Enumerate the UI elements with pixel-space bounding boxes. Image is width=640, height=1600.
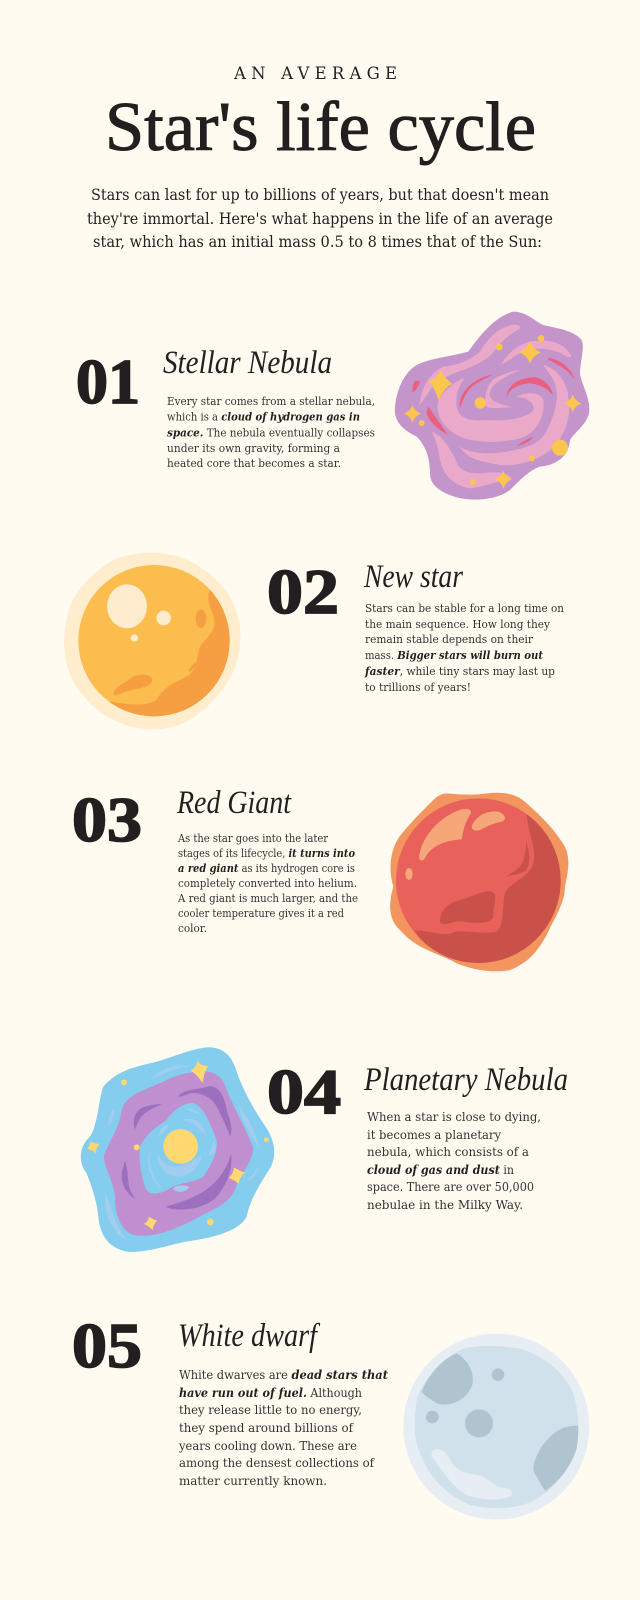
- description: When a star is close to dying,: [367, 1110, 541, 1124]
- heading: new star: New star: [363, 559, 463, 595]
- icon: stellar nebula: [395, 312, 589, 500]
- description: have run out of fuel. Although: [179, 1386, 362, 1400]
- description: Every star comes from a stellar nebula,: [167, 395, 375, 408]
- description: Stars can be stable for a long time on: [365, 602, 564, 615]
- heading: planetary nebula: Planetary Nebula: [363, 1062, 568, 1098]
- description: under its own gravity, forming a: [167, 442, 341, 455]
- description: [364, 602, 564, 694]
- step 05: white dwarf: [72, 1310, 589, 1520]
- description: [177, 832, 358, 935]
- step 03: red giant: [72, 784, 568, 971]
- icon: red giant: [390, 793, 568, 971]
- description: [178, 1368, 389, 1488]
- description: which is a cloud of hydrogen gas in: [167, 410, 360, 424]
- description: they spend around billions of: [179, 1421, 355, 1435]
- step 04: planetary nebula: [81, 1047, 568, 1252]
- description: remain stable depends on their: [365, 633, 534, 646]
- header: [87, 64, 553, 251]
- description: the main sequence. How long they: [365, 618, 551, 631]
- intro paragraph: Stars can last for up to billions of years, but that doesn't mean: [91, 185, 549, 204]
- description: space. The nebula eventually collapses: [167, 426, 375, 440]
- description: years cooling down. These are: [178, 1439, 357, 1453]
- description: among the densest collections of: [179, 1456, 376, 1470]
- step 02: new star: [64, 553, 564, 729]
- description: [167, 395, 375, 470]
- description: to trillions of years!: [365, 681, 471, 694]
- number 05: 05: [72, 1310, 142, 1381]
- description: cloud of gas and dust in: [367, 1163, 514, 1177]
- icon: white dwarf: [403, 1334, 589, 1520]
- heading: red giant: Red Giant: [176, 785, 292, 821]
- intro paragraph: they're immortal. Here's what happens in the life of an average: [87, 209, 553, 228]
- description: [367, 1110, 541, 1212]
- description: stages of its lifecycle, it turns into: [178, 847, 355, 860]
- number 04: 04: [267, 1056, 341, 1127]
- description: As the star goes into the later: [177, 832, 329, 845]
- description: completely converted into helium.: [178, 877, 357, 890]
- description: White dwarves are dead stars that: [179, 1368, 389, 1382]
- intro paragraph: star, which has an initial mass 0.5 to 8 times that of the Sun:: [93, 232, 542, 251]
- number 02: 02: [267, 556, 339, 627]
- number 03: 03: [72, 784, 142, 855]
- description: they release little to no energy,: [179, 1403, 362, 1417]
- eyebrow: an average: AN AVERAGE: [233, 64, 397, 83]
- icon: new star: [64, 553, 240, 729]
- description: mass. Bigger stars will burn out: [365, 649, 543, 662]
- description: faster, while tiny stars may last up: [364, 665, 555, 678]
- intro paragraph: [87, 185, 553, 251]
- description: a red giant as its hydrogen core is: [178, 862, 355, 875]
- description: matter currently known.: [179, 1474, 327, 1488]
- description: nebula, which consists of a: [367, 1145, 529, 1159]
- heading: white dwarf: White dwarf: [178, 1318, 320, 1354]
- description: space. There are over 50,000: [367, 1180, 534, 1194]
- description: cooler temperature gives it a red: [178, 907, 344, 920]
- description: it becomes a planetary: [367, 1128, 501, 1142]
- icon: planetary nebula: [81, 1047, 274, 1252]
- title: Star's life cycle: [105, 89, 536, 166]
- number 01: 01: [76, 346, 140, 417]
- description: A red giant is much larger, and the: [177, 892, 358, 905]
- heading: stellar nebula: Stellar Nebula: [163, 345, 332, 381]
- step 01: stellar nebula: [76, 312, 589, 500]
- description: color.: [178, 922, 207, 935]
- infographic canvas: [64, 66, 590, 1520]
- description: heated core that becomes a star.: [167, 457, 341, 470]
- description: nebulae in the Milky Way.: [367, 1198, 523, 1212]
